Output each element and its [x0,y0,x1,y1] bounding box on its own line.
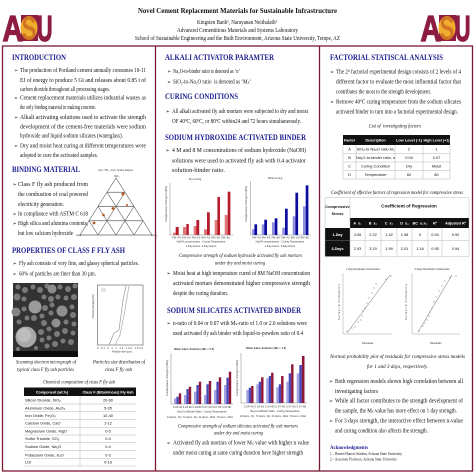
text: binding material bullets: the combustion of coal powered [18,191,88,198]
caption: silicates charts [178,423,298,437]
text: binding material bullets: but low calcium hydroxide [18,231,73,237]
text: sodium silicates bullet: used activated fly ash binder with liquid-to-powders ratio of 0.4 [173,330,303,337]
text: curing bullets: ➢ [166,110,170,115]
captions: SEM and particle size: Particles size distribution of [92,358,146,366]
text: properties bullets: 60% of particles are finer than 30 µm. [19,271,96,278]
chart: particle size distribution: Percent passing (%) [91,295,95,318]
table: chemical composition: Class F (Bituminous) Fly Ash [82,390,134,394]
table: factors: 0.04 [405,155,414,160]
table: factors: SiO₂-to-Na₂O ratio Mₛ [357,147,395,152]
text: alkali bullets: SiO₂-to-Na₂O ratio is denoted as ‘Mₛ’ [173,79,251,86]
table: regression coefficients: 0.94 [452,246,460,251]
table: factors: C [348,164,351,169]
text: regression bullets: and curing condition also affects the strength. [335,428,428,435]
table: factors: A [348,147,351,152]
table: factors: D [348,172,351,177]
chart: dry curing bars: Compressive Strength (MPa) [164,186,168,222]
text: introduction bullets: hydroxide and liquid sodium silicates (waterglass). [20,133,123,140]
table: chemical composition: 0-15 [104,460,112,465]
text: properties bullets: Fly ash consists of very fine, and glassy spherical particles. [19,260,139,267]
table: factors: Factor [344,138,356,142]
text: alkali bullets: ➢ [167,81,171,86]
table: regression coefficients: 1.98 [401,232,408,237]
text: introduction bullets: ➢ [14,116,18,121]
table: factors: 1 [435,147,438,152]
chart: dry curing bars: 1-Day Hours 3-Day Hours [186,244,217,248]
text: binding material bullets: electricity generation. [18,202,64,208]
text: introduction bullets: the only binding material in making concrete. [20,105,96,111]
heading: sodium hydroxide: SODIUM HYDROXIDE ACTIVATED BINDER [165,133,306,142]
image: SEM micrograph [12,283,78,357]
text: regression bullets [329,379,463,435]
chart: water glass Ms 1.0: Compressive Strength (MPa) [235,360,239,396]
authors and affiliation: Advanced Cementitious Materials and Systems Laboratory [177,28,298,34]
text: introduction bullets: carbon dioxide throughout all processing stages. [20,87,110,93]
table: regression coefficients: 1.99 [385,246,393,251]
chart: ternary diagram: CaO [76,233,81,237]
text: factorial bullets: The 2⁴ factorial experimental design consists of 2 levels of 4 [336,69,461,76]
table: factors: 80 [434,172,439,177]
panel: factorial statistical analysis [325,53,469,462]
chart: water glass Ms 2.0: Na₂O-to-Binder Ratio - Curing Temperature [177,410,227,414]
panel: properties of class F fly ash [12,246,146,466]
panel: alkali activator parameter [165,53,274,86]
chart: moist curing bars: Moist Curing [268,176,283,180]
text: sodium silicates bullet: ➢ [166,322,171,327]
caption: list of factors: List of investigating factors [368,123,421,130]
chart: water glass Ms 2.0: Compressive Strength (MPa) [165,360,169,396]
table: factors: Na₂O-to-binder ratio, n [356,155,395,160]
chart: dry curing bars: 4M-40 4M-60 4M-80 8M-40 8M-60 8M-80 [172,236,231,240]
chart: water glass Ms 1.0: Na₂O-to-Binder Ratio - Curing Temperature [250,409,300,413]
caption: normal probability plots: for 1 and 3 days, respectively. [367,363,428,370]
table: factors: 60 [407,172,412,177]
caption: hydroxide charts [179,252,302,266]
text: moist heat bullet: ➢ [166,272,171,277]
caption: hydroxide charts: Compressive strength of sodium hydroxide activated fly ash mortars [179,252,302,259]
text: introduction bullets: development of the cement-free materials were sodium [20,124,146,131]
table: regression coefficients: BC x₂x₃ [413,222,428,226]
chart: water glass Ms 1.0: 0.04-40 0.04-60 0.04-80 0.07-40 0.07-60 0.07-80 [244,404,307,408]
table: regression coefficients: 1.42 [385,232,393,237]
chart: water glass Ms 2.0: 24 Hours - Dry 72 Hours - Dry 24 Hours - Moist 72 Hours - Moist [167,415,233,419]
chart: dry curing bars [164,177,233,248]
chart: water glass Ms 2.0 [165,347,233,419]
text: factorial bullets: activated binder to turn into a factorial experimental design. [336,109,458,116]
table: chemical composition: 0-4 [105,444,112,449]
chart: moist curing bars: Compressive Strength (MPa) [244,186,248,222]
table: chemical composition: Sodium Oxide, Na₂O [25,444,61,449]
text: regression bullets: For 3 days strength, the interactive effect between n-value [335,418,463,425]
table: factors: Low Level (-1) [396,138,423,142]
text: introduction bullets: The production of Portland cement annually consumes 10-11 [20,67,146,74]
caption: normal probability plots: Normal probability plot of residuals for compressive stress models [329,353,465,360]
table: chemical composition [24,388,136,466]
text: acknowledgments: Acknowledgments [330,446,368,451]
text: binding material bullets: In compliance with ASTM C 618 [18,212,88,218]
table: regression coefficients: 0.92 [452,232,459,237]
text: acknowledgments: 1 – Barrett Honors Student, Arizona State University [330,452,402,457]
table: regression coefficients: 1.16 [416,246,424,251]
table: regression coefficients: 0.94 [431,232,440,237]
chart: water glass Ms 1.0: Water Glass Solutions (Ms = 1.0) [246,346,286,350]
text: introduction bullets: Alkali activating solutions used to activate the strength [20,115,146,121]
table: regression coefficients: A x₁ [353,222,362,226]
text: acknowledgments: 2 – Associate Professor, Arizona State University [330,458,397,462]
table: regression coefficients: 3.19 [369,246,377,251]
text: factorial bullets: ➢ [330,101,334,106]
table: chemical composition: 0-5 [105,428,111,433]
table: chemical composition: 0-3 [105,452,111,457]
table: regression coefficients: 2.22 [369,232,377,237]
table: chemical composition: Potassium Oxide, K₂O [25,452,64,457]
table: regression coefficients: Adjusted R² [445,222,467,226]
heading: sodium silicates: SODIUM SILICATES ACTIVATED BINDER [167,306,301,315]
text: curing bullets [166,108,308,125]
caption: silicates charts: under dry and moist curing [214,431,263,437]
panel: sodium hydroxide activated binder [164,133,311,297]
table: regression coefficients: 2.01 [401,246,408,251]
text: moist heat bullet [166,270,310,297]
text: properties bullets: ➢ [12,262,17,267]
logo: ASU right: S [440,10,454,48]
table: regression coefficients: Stress [332,211,343,216]
table: chemical composition: LOI [25,460,31,465]
captions: SEM and particle size: class F fly ash [105,366,132,373]
text: binding material bullets: ➢ [12,222,17,227]
text: sodium hydroxide bullet [166,147,306,174]
chart: moist curing bars [244,176,311,248]
chart: moist curing bars: NaOH concentration - Curing Temperature [256,240,305,244]
chart: water glass Ms 1.0 [235,346,307,418]
table: regression coefficients: 2.93 [354,246,361,251]
panel: binding material [12,165,157,237]
text: alkali bullets: ➢ [167,70,171,75]
table: chemical composition: 0-4 [105,436,112,441]
chart: ternary diagram: Al₂O₃ [151,233,157,237]
chart: water glass Ms 2.0: Water Glass Solutions (Ms = 2.0) [174,347,214,351]
table: chemical composition: Aluminum Oxide, Al₂O₃ [25,405,65,410]
table: regression coefficients: 0 [419,232,422,237]
authors and affiliation [135,20,340,42]
logo: ASU right: A [420,8,441,49]
text: factorial bullets [330,69,462,116]
chart: particle size distribution [91,285,144,354]
chart: ternary diagram: CaO - SiO₂ - Al₂O₃ Ternary Diagram [98,168,133,172]
heading: factorial analysis: FACTORIAL STATISCAL ANALYSIS [330,53,443,62]
text: regression bullets: ➢ [329,400,333,405]
text: silicates result bullet [166,440,309,457]
chart: 1 day normal probability plot: Residuals [362,341,374,345]
text: regression bullets: ➢ [329,380,333,385]
text: sodium hydroxide bullet: 4 M and 8 M concentrations of sodium hydroxide (NaOH) [172,147,306,154]
table: regression coefficients: 3-Days [331,247,344,251]
text: introduction bullets: EJ of energy to produce 5 Gt and releases about 0.85 t of [20,77,146,84]
text: binding material bullets [12,181,88,237]
text: silicates result bullet: under moist curing at same curing duration have higher strength [173,451,303,457]
text: curing bullets: All alkali activated fly ash mortars were subjected to dry and moist [172,108,308,115]
table: chemical composition: Component (wt.%) [36,390,69,394]
text: introduction bullets [14,67,147,159]
logo: ASU left [2,8,52,49]
table: regression coefficients: C x₃ [385,222,394,226]
table: factors: B [348,155,351,160]
table: factors: 2 [408,147,410,152]
text: binding material bullets: ➢ [12,213,17,218]
title: Novel Cement Replacement Materials for Sustainable Infrastructure [138,6,338,15]
text: acknowledgments [330,446,402,462]
chart: particle size distribution: 0.01 0.1 1 10 100 1000 [97,346,144,350]
chart: water glass Ms 2.0: 0.04-40 0.04-60 0.04-80 0.07-40 0.07-60 0.07-80 [173,405,232,409]
chart: 1 day normal probability plot: Normal % Probability [337,283,341,320]
chart: moist curing bars: 1-Day Hours 3-Day Hours [265,244,296,248]
logo: ASU left: U [37,8,52,49]
table: chemical composition: Magnesium Oxide, MgO [25,428,67,433]
chart: 3 days normal probability plot: Residuals [430,341,442,345]
table: factors: Dry [406,164,412,169]
table: regression coefficients: Compressive [325,204,351,209]
heading: curing conditions: CURING CONDITIONS [165,92,238,101]
table: regression coefficients: B x₂ [369,222,378,226]
heading: introduction: INTRODUCTION [12,53,66,62]
text: binding material bullets: ➢ [12,183,17,188]
table: regression coefficients: R² [433,222,438,226]
caption: chemical composition: Chemical composition of class F fly ash [43,378,115,386]
chart: particle size distribution: Particle size (µm) [112,350,132,354]
authors and affiliation: Kingsten Banh¹, Narayanan Neithalath² [197,20,277,26]
table: factors: Curing Condition [361,164,390,169]
heading: properties: PROPERTIES OF CLASS F FLY ASH [12,246,126,255]
table: regression coefficients: D x₄ [400,222,409,226]
table: chemical composition: 5-35 [104,405,112,410]
chart: 3 days normal probability plot [404,267,460,345]
chart: dry curing bars: Dry Curing [189,177,202,181]
table: chemical composition: 10-40 [103,413,114,418]
table: chemical composition: Iron Oxide, Fe₂O₃ [25,413,56,418]
logo: ASU right [420,8,470,49]
table: regression coefficients: 1-Day [332,233,343,237]
chart: water glass Ms 1.0: 24 Hours - Dry 72 Hours - Dry 24 Hours - Moist 72 Hours - Moist [240,414,306,418]
panel: curing conditions [165,92,308,125]
heading: alkali activator parameter: ALKALI ACTIVATOR PARAMTER [165,53,274,62]
text: regression bullets: ➢ [329,420,333,425]
chart: 3 days normal probability plot: 3 Days Residuals of Estimates [414,267,450,271]
text: regression bullets: investigating factors [335,388,379,395]
text: properties bullets: ➢ [12,273,17,278]
chart: ternary diagram [76,168,157,237]
text: binding material bullets: High silica and alumina contents, [18,221,88,227]
text: sodium silicates bullet [166,320,307,337]
chart: 1 day normal probability plot [337,267,392,345]
text: sodium hydroxide bullet: ➢ [166,149,170,154]
text: curing bullets: OF 40ºC, 60ºC, or 80ºC within24 and 72 hours simultaneously. [172,119,301,125]
authors and affiliation: School of Sustainable Engineering and the Built Environment, Arizona State University, Tempe, AZ [135,35,340,42]
table: factors [343,135,450,179]
table: factors: Moist [432,164,442,169]
text: properties bullets [12,260,139,278]
table: chemical composition: 1-12 [104,421,112,426]
text: sodium hydroxide bullet: solution-binder ratio. [172,168,226,174]
table: regression coefficients: Coefficient of Regression [381,204,437,208]
text: moist heat bullet: Moist heat at high temperature cured of 8M NaOH concentration [173,270,310,277]
table: regression coefficients [325,198,469,256]
table: chemical composition: Silicon Dioxide, SiO₂ [25,397,61,402]
table: factors: 0.07 [433,155,440,160]
text: factorial bullets: ➢ [330,71,334,76]
text: factorial bullets: Remove 40ºC curing temperature from the sodium silicates [336,99,462,106]
caption: silicates charts: Compressive strength of sodium silicates activated fly ash mortars [178,423,298,430]
caption: hydroxide charts: under dry and moist curing [215,260,265,266]
table: chemical composition: Sulfur Trioxide, SO₃ [25,436,60,441]
text: silicates result bullet: Activated fly ash mortars of lower Mₛ value with higher n value [173,440,309,447]
table: factors: Description [365,138,386,142]
text: introduction bullets: Dry and moist heat curing at different temperatures were [20,143,146,150]
text: regression bullets: While all factor contributes to the strength development of [335,398,463,405]
text: silicates result bullet: ➢ [166,442,171,447]
table: chemical composition: 20-60 [103,397,114,402]
panel: introduction [12,53,147,159]
text: introduction bullets: ➢ [14,97,18,102]
text: introduction bullets: Cement replacement materials utilizes industrial wastes as [20,96,147,102]
text: alkali bullets [167,68,251,86]
heading: binding material: BINDING MATERIAL [12,165,80,174]
text: regression bullets: the sample, the Mₛ value has more effect on 1 day strength. [335,408,457,415]
table: regression coefficients: 0.95 [431,246,439,251]
text: moist heat bullet: activated mortars demonstrated higher compressive strength [173,281,310,287]
captions: SEM and particle size: Scanning electron micrograph of [16,358,77,366]
text: alkali bullets: Na₂O-to-binder ratio is denoted as ‘n’ [173,68,240,75]
text: sodium hydroxide bullet: solutions were used to activated fly ash with 0.4 activator [172,158,306,165]
chart: 1 day normal probability plot: 1 Day Residuals of Estimates [346,267,381,271]
text: factorial bullets: different factor to evaluate the most influential factor that [336,79,461,86]
text: factorial bullets: contributes the most to the strength development. [336,90,431,96]
caption: normal probability plots [329,353,465,370]
chart: moist curing bars: 4M-40 4M-60 4M-80 8M-40 8M-60 8M-80 [252,236,310,240]
logo: ASU left: A [2,8,23,49]
text: introduction bullets: adopted to cure the activated samples. [20,153,98,159]
table: factors: Temperature [365,172,386,177]
logo: ASU left: S [22,10,36,48]
text: sodium silicates bullet: n-ratio of 0.04 or 0.07 with Mₛ-ratio of 1.0 or 2.0 solutions were [173,320,307,327]
table: regression coefficients: 4.06 [354,232,361,237]
table: factors: High Level (+1) [424,138,450,142]
text: regression bullets: Both regression models shown high correlation between all [335,379,463,385]
table: chemical composition: Calcium Oxide, CaO [25,421,60,426]
chart: dry curing bars: NaOH concentration - Curing Temperature [177,240,226,244]
captions: SEM and particle size [16,358,146,373]
text: introduction bullets: ➢ [14,69,18,74]
text: binding material bullets: Class F fly ash produced from [18,181,88,188]
text: moist heat bullet: despite the curing duration. [173,291,228,297]
chart: ternary diagram: SiO₂ [114,174,119,178]
captions: SEM and particle size: typical class F fly ash particles [17,366,74,373]
text: introduction bullets: ➢ [14,145,18,150]
chart: 3 days normal probability plot: Normal % Probability [404,283,408,320]
panel: sodium silicates activated binder [165,306,309,457]
